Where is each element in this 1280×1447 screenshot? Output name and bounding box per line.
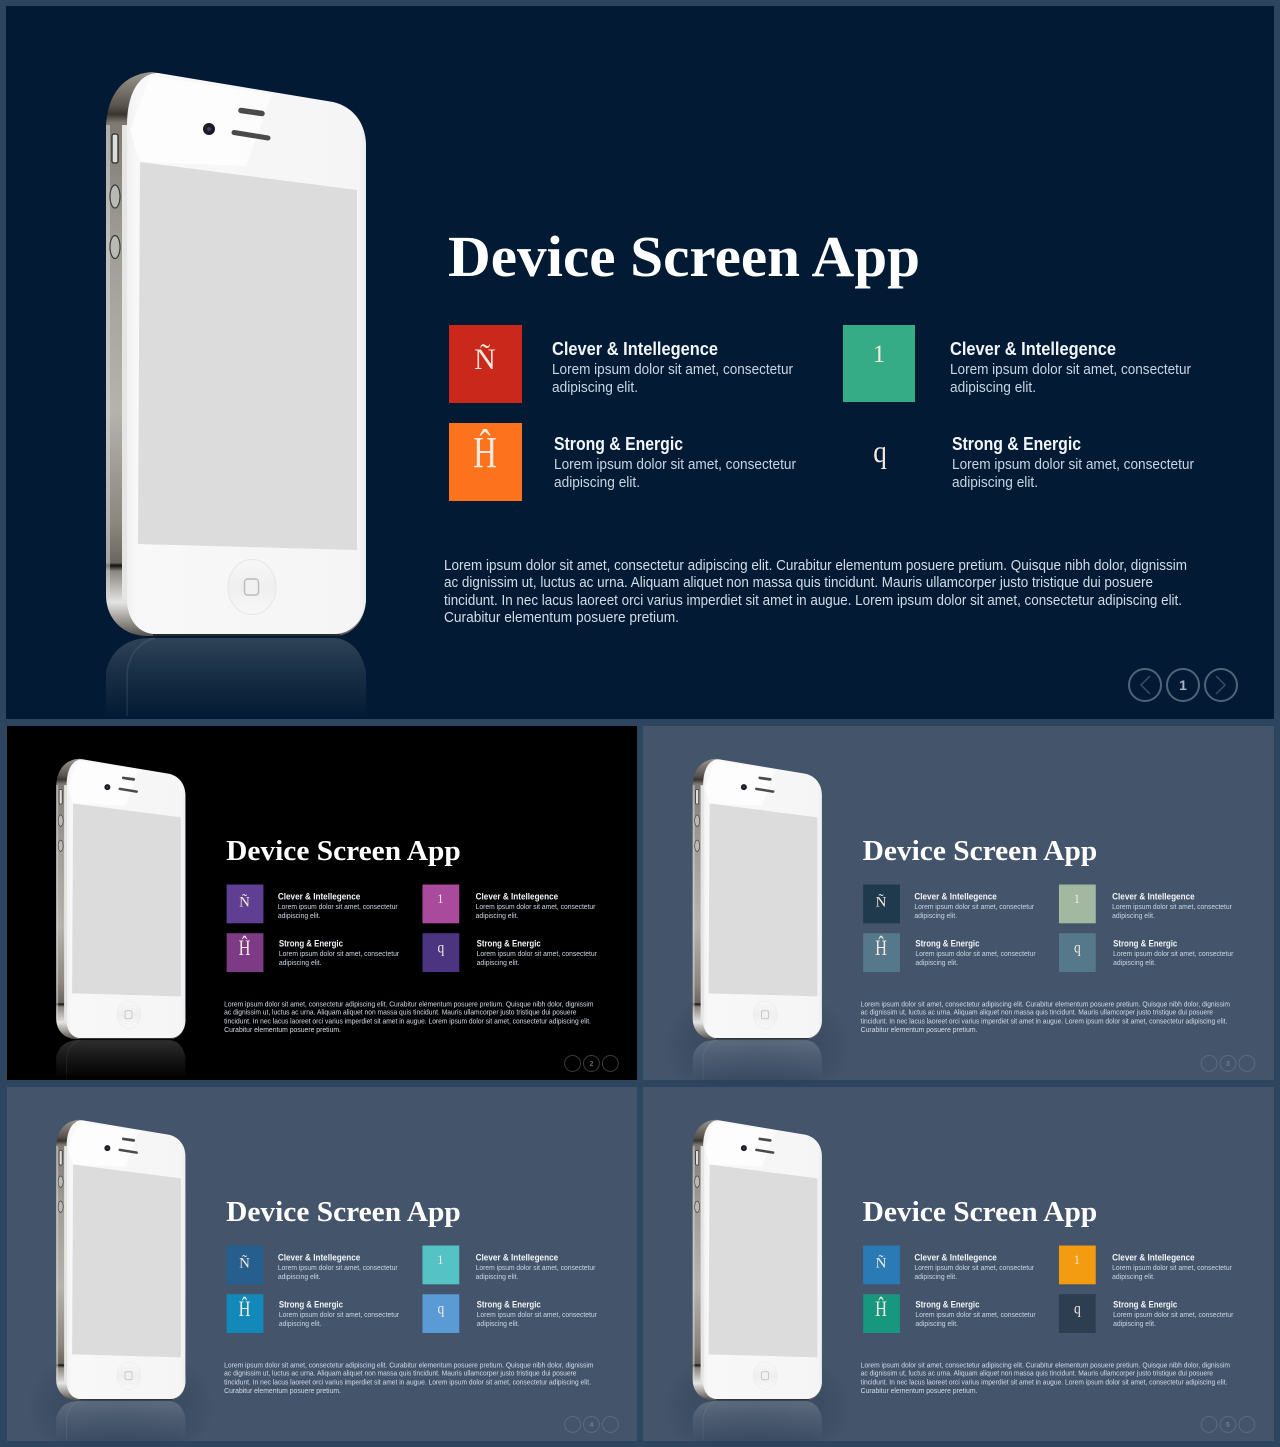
feature: clever top right: Lorem ipsum dolor sit amet, consectetur — [1112, 902, 1232, 911]
feature: clever top left: Lorem ipsum dolor sit amet, consectetur — [278, 1263, 398, 1272]
feature: strong bottom right: adipiscing elit. — [952, 474, 1038, 491]
feature: strong bottom left: adipiscing elit. — [915, 1319, 958, 1328]
feature: clever top left: adipiscing elit. — [278, 911, 321, 920]
feature: clever top left: Ñ — [876, 894, 887, 910]
paragraph: tincidunt. In nec lacus laoreet orci varius imperdiet sit amet in augue. Lorem ipsum dolor sit amet, consectetur adipiscing elit. — [861, 1378, 1227, 1387]
title: Device Screen App — [863, 1196, 1097, 1228]
feature: strong bottom left — [449, 423, 796, 501]
icon: white phone with reflection — [56, 1120, 185, 1440]
feature: clever top right — [422, 885, 596, 923]
paragraph — [224, 1360, 593, 1395]
panel: black and purple slide — [7, 726, 637, 1080]
feature: clever top left — [863, 1246, 1035, 1284]
feature: clever top left: Lorem ipsum dolor sit amet, consectetur — [552, 361, 793, 378]
feature: strong bottom left — [863, 1294, 1036, 1333]
feature: strong bottom left: Strong & Energic — [554, 434, 683, 454]
paragraph: Curabitur elementum posuere pretium. — [444, 609, 679, 626]
feature: clever top right: Clever & Intellegence — [1112, 891, 1195, 901]
feature: strong bottom left — [227, 933, 400, 972]
feature: strong bottom right: Strong & Energic — [477, 1300, 541, 1310]
paragraph: ac dignissim ut, luctus ac urna. Aliquam aliquet non massa quis tincidunt. Mauris ullamcorper justo tristique dui posuere — [444, 574, 1153, 591]
feature: strong bottom right: Lorem ipsum dolor sit amet, consectetur — [1113, 1310, 1234, 1319]
feature: clever top left: Ñ — [239, 894, 250, 910]
feature: strong bottom right: Strong & Energic — [952, 434, 1081, 454]
paragraph — [224, 999, 593, 1034]
feature: clever top left: Clever & Intellegence — [914, 891, 997, 901]
feature: strong bottom right — [422, 1294, 597, 1333]
feature: strong bottom right: adipiscing elit. — [1113, 1319, 1156, 1328]
icon: white phone with reflection — [106, 72, 366, 716]
feature: clever top left — [449, 325, 793, 403]
feature: clever top left: Ñ — [474, 343, 496, 376]
feature: strong bottom right — [873, 434, 1194, 491]
paragraph: ac dignissim ut, luctus ac urna. Aliquam aliquet non massa quis tincidunt. Mauris ullamcorper justo tristique dui posuere — [861, 1369, 1213, 1378]
feature: clever top left: Lorem ipsum dolor sit amet, consectetur — [278, 902, 398, 911]
feature: strong bottom right — [1059, 933, 1234, 972]
page navigation: 5 — [1226, 1422, 1230, 1429]
page navigation — [565, 1055, 618, 1071]
feature: clever top right: Clever & Intellegence — [476, 891, 558, 901]
feature: strong bottom right: q — [437, 1301, 445, 1318]
feature: clever top right: Lorem ipsum dolor sit amet, consectetur — [1112, 1263, 1232, 1272]
paragraph: Lorem ipsum dolor sit amet, consectetur adipiscing elit. Curabitur elementum posuere pretium. Quisque nibh dolor, dignissim — [861, 1360, 1230, 1369]
feature: clever top left: adipiscing elit. — [552, 379, 638, 396]
feature: clever top right: Lorem ipsum dolor sit amet, consectetur — [950, 361, 1191, 378]
page navigation — [1129, 669, 1237, 701]
feature: strong bottom right: adipiscing elit. — [477, 958, 519, 967]
paragraph: tincidunt. In nec lacus laoreet orci varius imperdiet sit amet in augue. Lorem ipsum dolor sit amet, consectetur adipiscing elit. — [444, 592, 1182, 609]
feature: strong bottom right: Strong & Energic — [1113, 939, 1177, 949]
feature: clever top right: Lorem ipsum dolor sit amet, consectetur — [476, 1263, 596, 1272]
feature: strong bottom right: Strong & Energic — [1113, 1300, 1177, 1310]
feature: clever top left: Lorem ipsum dolor sit amet, consectetur — [914, 902, 1035, 911]
paragraph: Lorem ipsum dolor sit amet, consectetur adipiscing elit. Curabitur elementum posuere pretium. Quisque nibh dolor, dignissim — [444, 557, 1187, 574]
feature: strong bottom right: q — [873, 435, 887, 470]
feature: strong bottom right: q — [1074, 1301, 1081, 1318]
paragraph: ac dignissim ut, luctus ac urna. Aliquam aliquet non massa quis tincidunt. Mauris ullamcorper justo tristique dui posuere — [224, 1369, 577, 1378]
page navigation: 1 — [1179, 677, 1187, 693]
feature: clever top right: Clever & Intellegence — [950, 339, 1116, 359]
feature: clever top right — [1059, 885, 1232, 923]
feature: strong bottom right: q — [1074, 940, 1081, 957]
feature: clever top right: adipiscing elit. — [1112, 911, 1155, 920]
icon: white phone with reflection — [56, 759, 185, 1079]
paragraph: ac dignissim ut, luctus ac urna. Aliquam aliquet non massa quis tincidunt. Mauris ullamcorper justo tristique dui posuere — [224, 1008, 577, 1017]
feature: clever top left: Clever & Intellegence — [552, 339, 718, 359]
panel: slate and sage slide — [643, 726, 1274, 1111]
feature: clever top right: 1 — [437, 892, 443, 906]
feature: strong bottom left: adipiscing elit. — [279, 1319, 322, 1328]
feature: clever top right: adipiscing elit. — [476, 1272, 518, 1281]
paragraph: Lorem ipsum dolor sit amet, consectetur adipiscing elit. Curabitur elementum posuere pretium. Quisque nibh dolor, dignissim — [224, 1360, 593, 1369]
feature: strong bottom left: Lorem ipsum dolor sit amet, consectetur — [279, 1310, 400, 1319]
page navigation — [565, 1416, 618, 1432]
paragraph: Curabitur elementum posuere pretium. — [861, 1386, 977, 1395]
feature: clever top right: Lorem ipsum dolor sit amet, consectetur — [476, 902, 596, 911]
feature: clever top left: Clever & Intellegence — [278, 891, 360, 901]
paragraph — [444, 557, 1187, 626]
feature: strong bottom left — [863, 933, 1036, 972]
paragraph: Curabitur elementum posuere pretium. — [861, 1025, 977, 1034]
title: Device Screen App — [226, 835, 461, 867]
feature: clever top right: adipiscing elit. — [950, 379, 1036, 396]
feature: clever top right: Clever & Intellegence — [476, 1252, 558, 1262]
paragraph: ac dignissim ut, luctus ac urna. Aliquam aliquet non massa quis tincidunt. Mauris ullamcorper justo tristique dui posuere — [861, 1008, 1213, 1017]
feature: clever top right: adipiscing elit. — [1112, 1272, 1155, 1281]
panel: slate and multicolor slide — [643, 1087, 1274, 1447]
feature: strong bottom left: Ĥ — [239, 936, 251, 961]
feature: clever top left — [227, 1246, 398, 1284]
title: Device Screen App — [863, 835, 1097, 867]
feature: clever top left — [863, 885, 1035, 923]
feature: strong bottom right: adipiscing elit. — [1113, 958, 1156, 967]
feature: strong bottom right: adipiscing elit. — [477, 1319, 519, 1328]
feature: clever top right: 1 — [1074, 1253, 1080, 1267]
feature: strong bottom left: adipiscing elit. — [915, 958, 958, 967]
feature: clever top right — [422, 1246, 596, 1284]
paragraph — [861, 999, 1230, 1034]
feature: strong bottom left: adipiscing elit. — [279, 958, 322, 967]
feature: strong bottom left: adipiscing elit. — [554, 474, 640, 491]
paragraph: tincidunt. In nec lacus laoreet orci varius imperdiet sit amet in augue. Lorem ipsum dolor sit amet, consectetur adipiscing elit. — [224, 1378, 591, 1387]
icon: white phone with reflection — [693, 759, 822, 1079]
feature: clever top right: adipiscing elit. — [476, 911, 518, 920]
paragraph: Lorem ipsum dolor sit amet, consectetur adipiscing elit. Curabitur elementum posuere pretium. Quisque nibh dolor, dignissim — [224, 999, 593, 1008]
feature: strong bottom right — [422, 933, 597, 972]
page navigation — [1201, 1416, 1255, 1432]
page navigation — [1201, 1055, 1255, 1071]
paragraph: tincidunt. In nec lacus laoreet orci varius imperdiet sit amet in augue. Lorem ipsum dolor sit amet, consectetur adipiscing elit. — [224, 1017, 591, 1026]
feature: strong bottom right: Lorem ipsum dolor sit amet, consectetur — [477, 1310, 597, 1319]
shadow halo — [663, 1342, 852, 1447]
feature: clever top right: 1 — [1074, 892, 1080, 906]
feature: clever top left: Clever & Intellegence — [914, 1252, 997, 1262]
panel: slate and blue slide — [7, 1087, 637, 1447]
shadow halo — [26, 1342, 215, 1447]
feature: strong bottom right — [1059, 1294, 1234, 1333]
shadow halo — [663, 981, 852, 1111]
feature: strong bottom left: Ĥ — [239, 1297, 251, 1322]
feature: clever top left: Ñ — [239, 1255, 250, 1271]
feature: strong bottom left: Ĥ — [473, 429, 497, 477]
title: Device Screen App — [448, 224, 920, 289]
feature: strong bottom right: Lorem ipsum dolor sit amet, consectetur — [952, 456, 1194, 473]
icon: white phone with reflection — [693, 1120, 822, 1440]
feature: clever top left: Lorem ipsum dolor sit amet, consectetur — [914, 1263, 1035, 1272]
feature: strong bottom left: Ĥ — [875, 1297, 887, 1322]
feature: strong bottom right: Lorem ipsum dolor sit amet, consectetur — [1113, 949, 1234, 958]
feature: strong bottom right: q — [437, 940, 445, 957]
feature: clever top right — [1059, 1246, 1232, 1284]
feature: clever top left: adipiscing elit. — [914, 911, 957, 920]
paragraph — [861, 1360, 1230, 1395]
feature: clever top left: adipiscing elit. — [914, 1272, 957, 1281]
feature: strong bottom left: Strong & Energic — [915, 1300, 979, 1310]
paragraph: Curabitur elementum posuere pretium. — [224, 1386, 341, 1395]
panel: main slide — [6, 6, 1274, 719]
feature: strong bottom right: Lorem ipsum dolor sit amet, consectetur — [477, 949, 597, 958]
feature: clever top left: adipiscing elit. — [278, 1272, 321, 1281]
feature: clever top left: Clever & Intellegence — [278, 1252, 360, 1262]
page navigation: 4 — [590, 1422, 594, 1429]
title: Device Screen App — [226, 1196, 461, 1228]
feature: clever top right: 1 — [437, 1253, 443, 1267]
paragraph: Lorem ipsum dolor sit amet, consectetur adipiscing elit. Curabitur elementum posuere pretium. Quisque nibh dolor, dignissim — [861, 999, 1230, 1008]
feature: strong bottom left: Strong & Energic — [279, 1300, 343, 1310]
feature: clever top right: 1 — [873, 341, 885, 368]
feature: strong bottom left: Strong & Energic — [915, 939, 979, 949]
feature: strong bottom left: Lorem ipsum dolor sit amet, consectetur — [554, 456, 796, 473]
feature: strong bottom left: Ĥ — [875, 936, 887, 961]
feature: strong bottom left — [227, 1294, 400, 1333]
feature: strong bottom left: Lorem ipsum dolor sit amet, consectetur — [915, 1310, 1036, 1319]
feature: clever top left — [227, 885, 398, 923]
feature: strong bottom right: Strong & Energic — [477, 939, 541, 949]
feature: clever top right: Clever & Intellegence — [1112, 1252, 1195, 1262]
page navigation: 3 — [1226, 1061, 1230, 1068]
feature: strong bottom left: Lorem ipsum dolor sit amet, consectetur — [279, 949, 400, 958]
paragraph: Curabitur elementum posuere pretium. — [224, 1025, 341, 1034]
feature: clever top right — [843, 325, 1191, 402]
feature: strong bottom left: Strong & Energic — [279, 939, 343, 949]
paragraph: tincidunt. In nec lacus laoreet orci varius imperdiet sit amet in augue. Lorem ipsum dolor sit amet, consectetur adipiscing elit. — [861, 1017, 1227, 1026]
page navigation: 2 — [590, 1061, 594, 1068]
feature: strong bottom left: Lorem ipsum dolor sit amet, consectetur — [915, 949, 1036, 958]
feature: clever top left: Ñ — [876, 1255, 887, 1271]
